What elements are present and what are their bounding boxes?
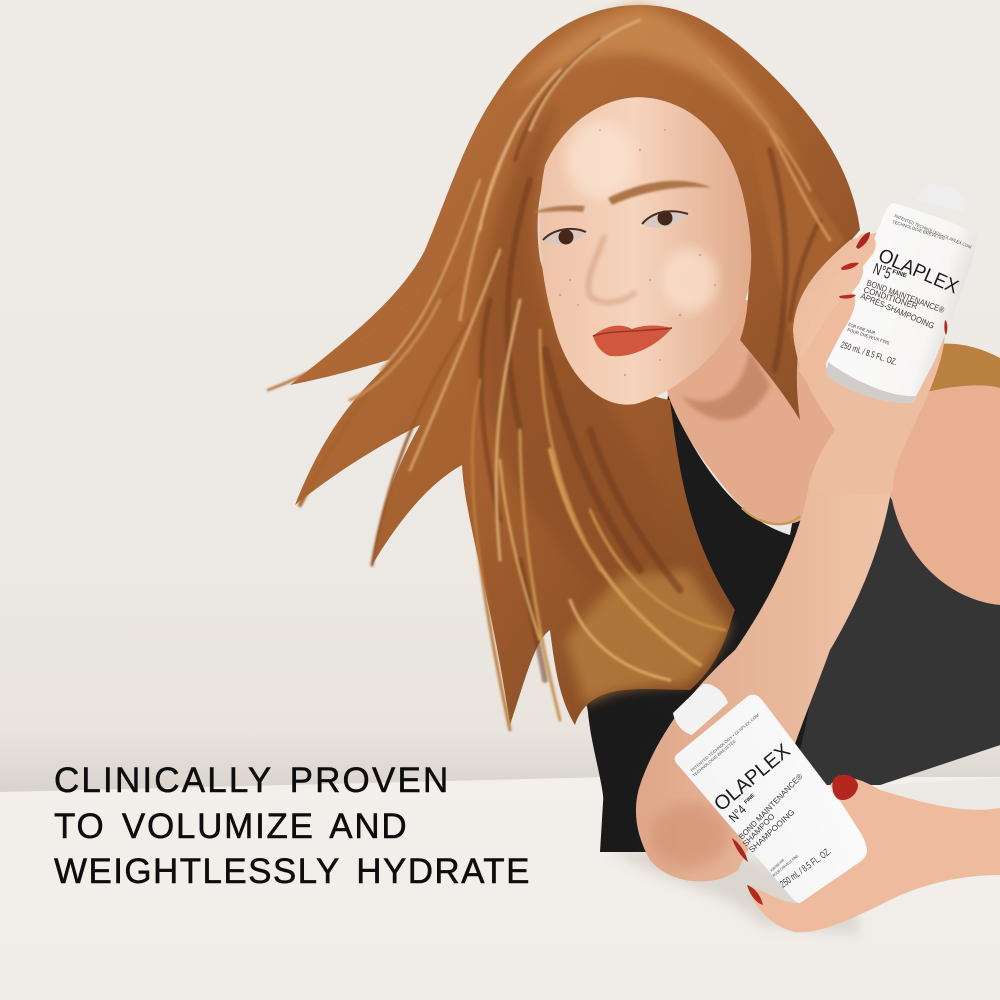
bottle 5 label: FINE	[891, 269, 908, 280]
bottle 5 label: CONDITIONER	[862, 284, 919, 311]
bottle 5 label: 250 mL / 8.5 FL. OZ.	[839, 339, 899, 367]
upper hand fingers	[793, 232, 947, 390]
pinky nail	[747, 885, 763, 905]
bottle 4 label: 250 mL / 8.5 FL. OZ.	[778, 846, 833, 890]
left eye	[543, 229, 586, 244]
bottle 5 label: BOND MAINTENANCE®	[865, 277, 946, 315]
black top	[585, 395, 1000, 852]
bottle 5 label: FOR FINE HAIR	[848, 322, 876, 336]
bottle 4 label: SHAMPOO	[741, 812, 777, 848]
bottle 4 label: SHAMPOOING	[747, 808, 797, 854]
bottle 4 label: PATENTED TECHNOLOGY • OLAPLEX.COM	[689, 712, 760, 773]
red nails	[856, 232, 870, 249]
bottle 5 label: APRÈS-SHAMPOOING	[859, 291, 936, 331]
bottle 4 label: OLAPLEX	[710, 740, 795, 816]
hair behind shoulder right	[925, 344, 1000, 398]
freckled elbow	[650, 803, 730, 867]
bottle 4 label: FOR FINE HAIR	[770, 858, 785, 873]
bottle: No 4 shampoo	[673, 684, 869, 904]
flyaway hair strands	[268, 20, 830, 730]
headline: CLINICALLY PROVEN	[54, 761, 450, 800]
hair mass	[290, 5, 860, 725]
lower hand	[732, 775, 1000, 932]
table shadow	[610, 850, 860, 935]
thumb nail	[832, 775, 858, 800]
table surface	[0, 777, 1000, 1000]
bottle 4 label: FINE	[743, 792, 757, 805]
forearm and upper hand	[636, 232, 945, 881]
bottle 5 label: TECHNOLOGIE BREVETÉE	[892, 218, 946, 241]
headline: TO VOLUMIZE AND	[54, 806, 408, 846]
bottle: No 5 conditioner	[826, 184, 977, 403]
background wall	[0, 0, 1000, 795]
nose	[588, 235, 636, 302]
chest shadow	[680, 350, 770, 420]
headline: WEIGHTLESSLY HYDRATE	[54, 852, 531, 891]
shoulder right	[880, 385, 1000, 605]
lips	[593, 326, 672, 356]
freckles	[559, 129, 716, 376]
bottle 4 label: POUR CHEVEUX FINS	[772, 854, 799, 878]
bottle 5 label	[839, 213, 972, 367]
bottle 5 label: N°5	[871, 261, 893, 283]
bottle 4 label: N°4	[726, 802, 749, 825]
bottle 4 label: TECHNOLOGIE BREVETÉE	[691, 738, 737, 778]
forehead and cheek highlights	[566, 122, 634, 198]
necklace	[742, 508, 800, 524]
bottle 4 label	[689, 712, 833, 890]
bottle 5 label: PATENTED TECHNOLOGY • OLAPLEX.COM	[894, 213, 972, 250]
headline	[54, 761, 531, 891]
bottle 5 label: OLAPLEX	[875, 244, 962, 298]
dark streaks	[481, 40, 820, 680]
neck and chest	[650, 300, 845, 524]
right eye	[642, 211, 688, 228]
table light strip behind lower hand	[880, 778, 1000, 840]
bottle 4 label: BOND MAINTENANCE®	[737, 772, 805, 841]
face	[532, 97, 751, 405]
bottle 5 label: POUR CHEVEUX FINS	[847, 327, 890, 346]
eyebrows	[532, 205, 585, 213]
